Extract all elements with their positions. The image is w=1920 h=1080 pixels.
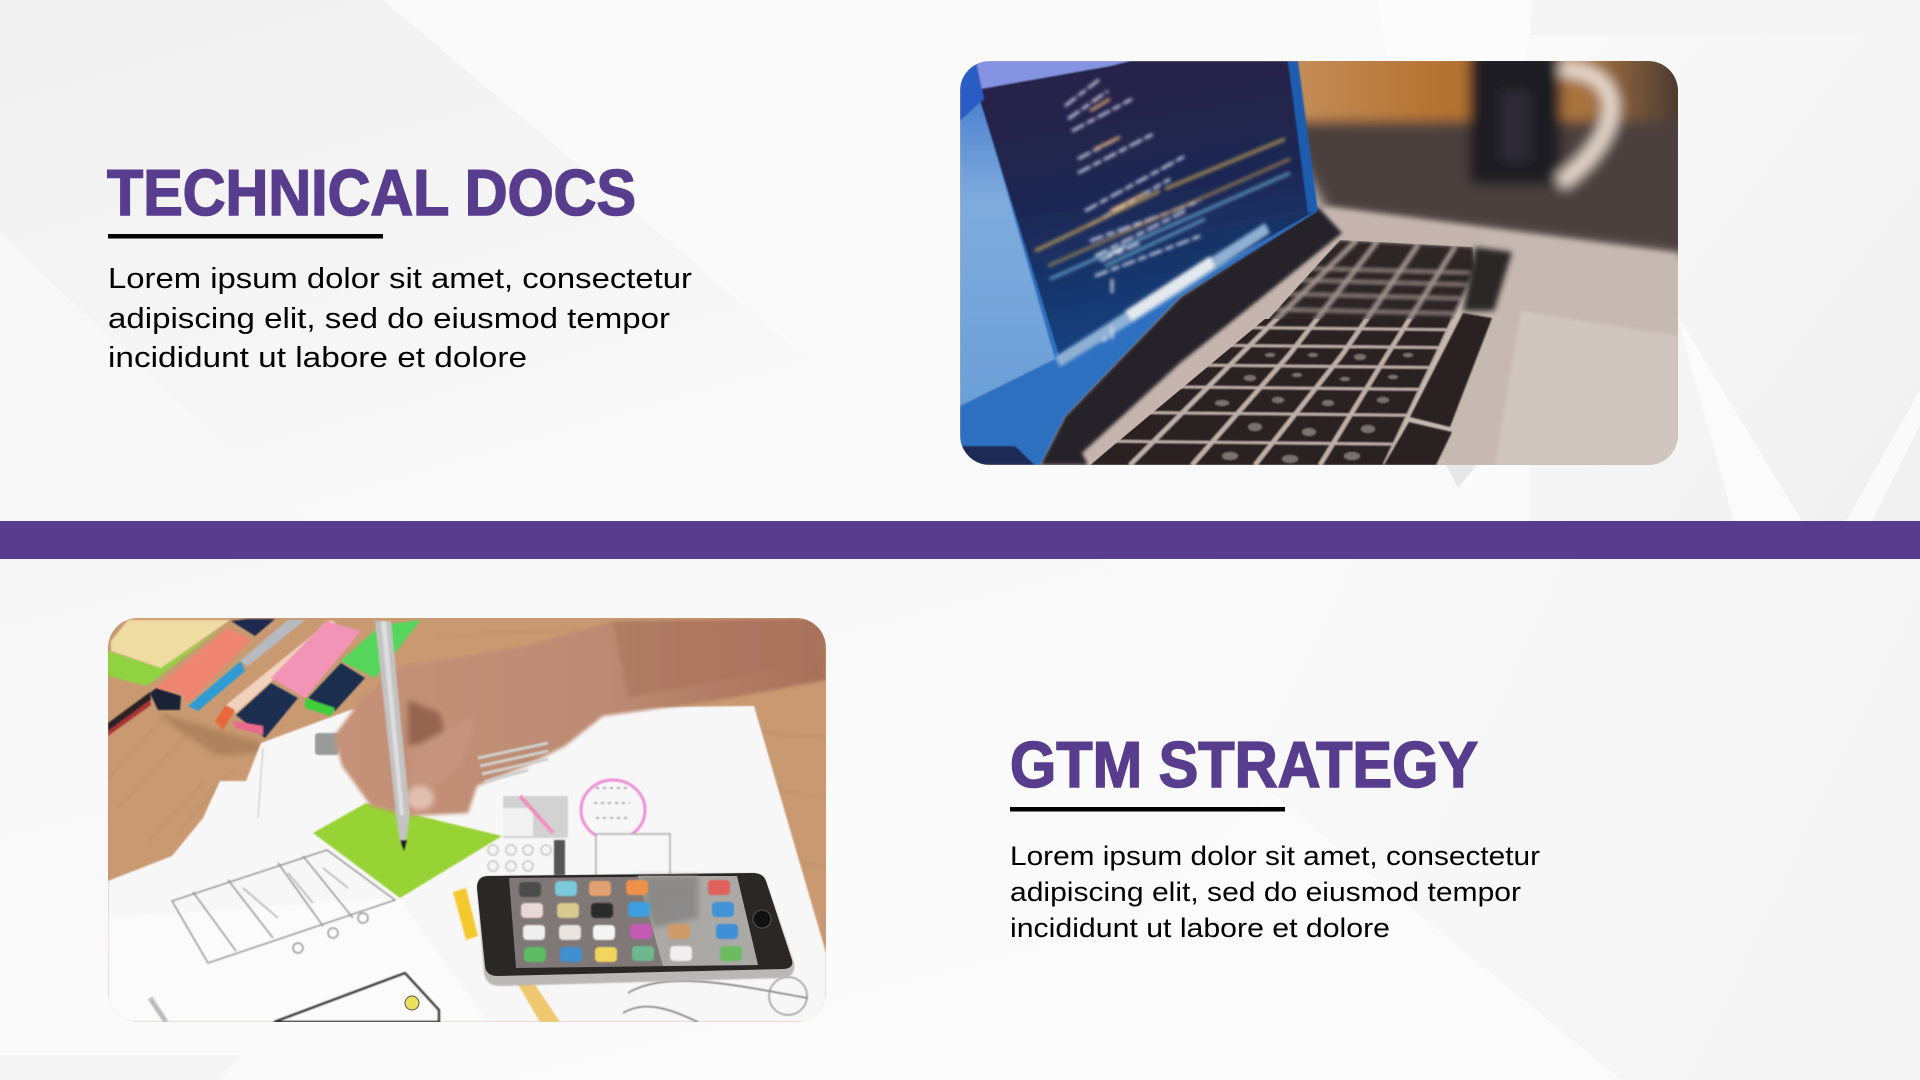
- wireframe sketch: [150, 850, 808, 1022]
- heading: gtm strategy: GTM STRATEGY: [1010, 728, 1478, 801]
- heading underline: [1010, 807, 1285, 812]
- wood grain: [108, 628, 826, 868]
- code lines: [1035, 79, 1290, 341]
- trackpad: [1495, 311, 1678, 465]
- body text: Lorem ipsum dolor sit amet, consectetur: [1010, 841, 1540, 871]
- hinge: [1040, 207, 1342, 465]
- pink circled sketch: [478, 743, 670, 884]
- screen: [960, 61, 1318, 465]
- keyboard lower rows: [1090, 319, 1454, 465]
- heading underline: [108, 234, 383, 238]
- body text: [1010, 841, 1540, 943]
- app icons: [519, 880, 742, 962]
- dock: [1055, 223, 1270, 367]
- arm and hand: [334, 618, 826, 816]
- keyboard upper rows: [1268, 240, 1474, 319]
- pen: [375, 621, 410, 851]
- body text: incididunt ut labore et dolore: [108, 342, 527, 374]
- body text: adipiscing elit, sed do eiusmod tempor: [108, 303, 670, 335]
- section: gtm strategy text: [1010, 728, 1540, 943]
- palm shadow and thumb: [406, 699, 446, 812]
- paper sheets: [108, 706, 826, 1022]
- laptop deck: [1322, 204, 1678, 462]
- heading: technical docs: TECHNICAL DOCS: [107, 156, 636, 229]
- desk and mug: [1280, 51, 1690, 256]
- body text: incididunt ut labore et dolore: [1010, 913, 1390, 943]
- green sticky note: [313, 803, 502, 898]
- body text: Lorem ipsum dolor sit amet, consectetur: [108, 263, 692, 295]
- photo: hand sketching app wireframes: [108, 618, 826, 1022]
- markers and notes: [108, 619, 421, 755]
- key legends: [1215, 353, 1413, 463]
- photo: laptop with code: [960, 51, 1690, 465]
- yellow pencil: [453, 888, 560, 1022]
- marker shadow on wood: [158, 713, 263, 756]
- keyboard function block and space bar: [1384, 247, 1512, 465]
- smartphone: [477, 873, 794, 986]
- section: technical docs text: [107, 156, 692, 374]
- body text: adipiscing elit, sed do eiusmod tempor: [1010, 877, 1521, 907]
- body text: [108, 263, 692, 374]
- purple divider band: [0, 521, 1920, 559]
